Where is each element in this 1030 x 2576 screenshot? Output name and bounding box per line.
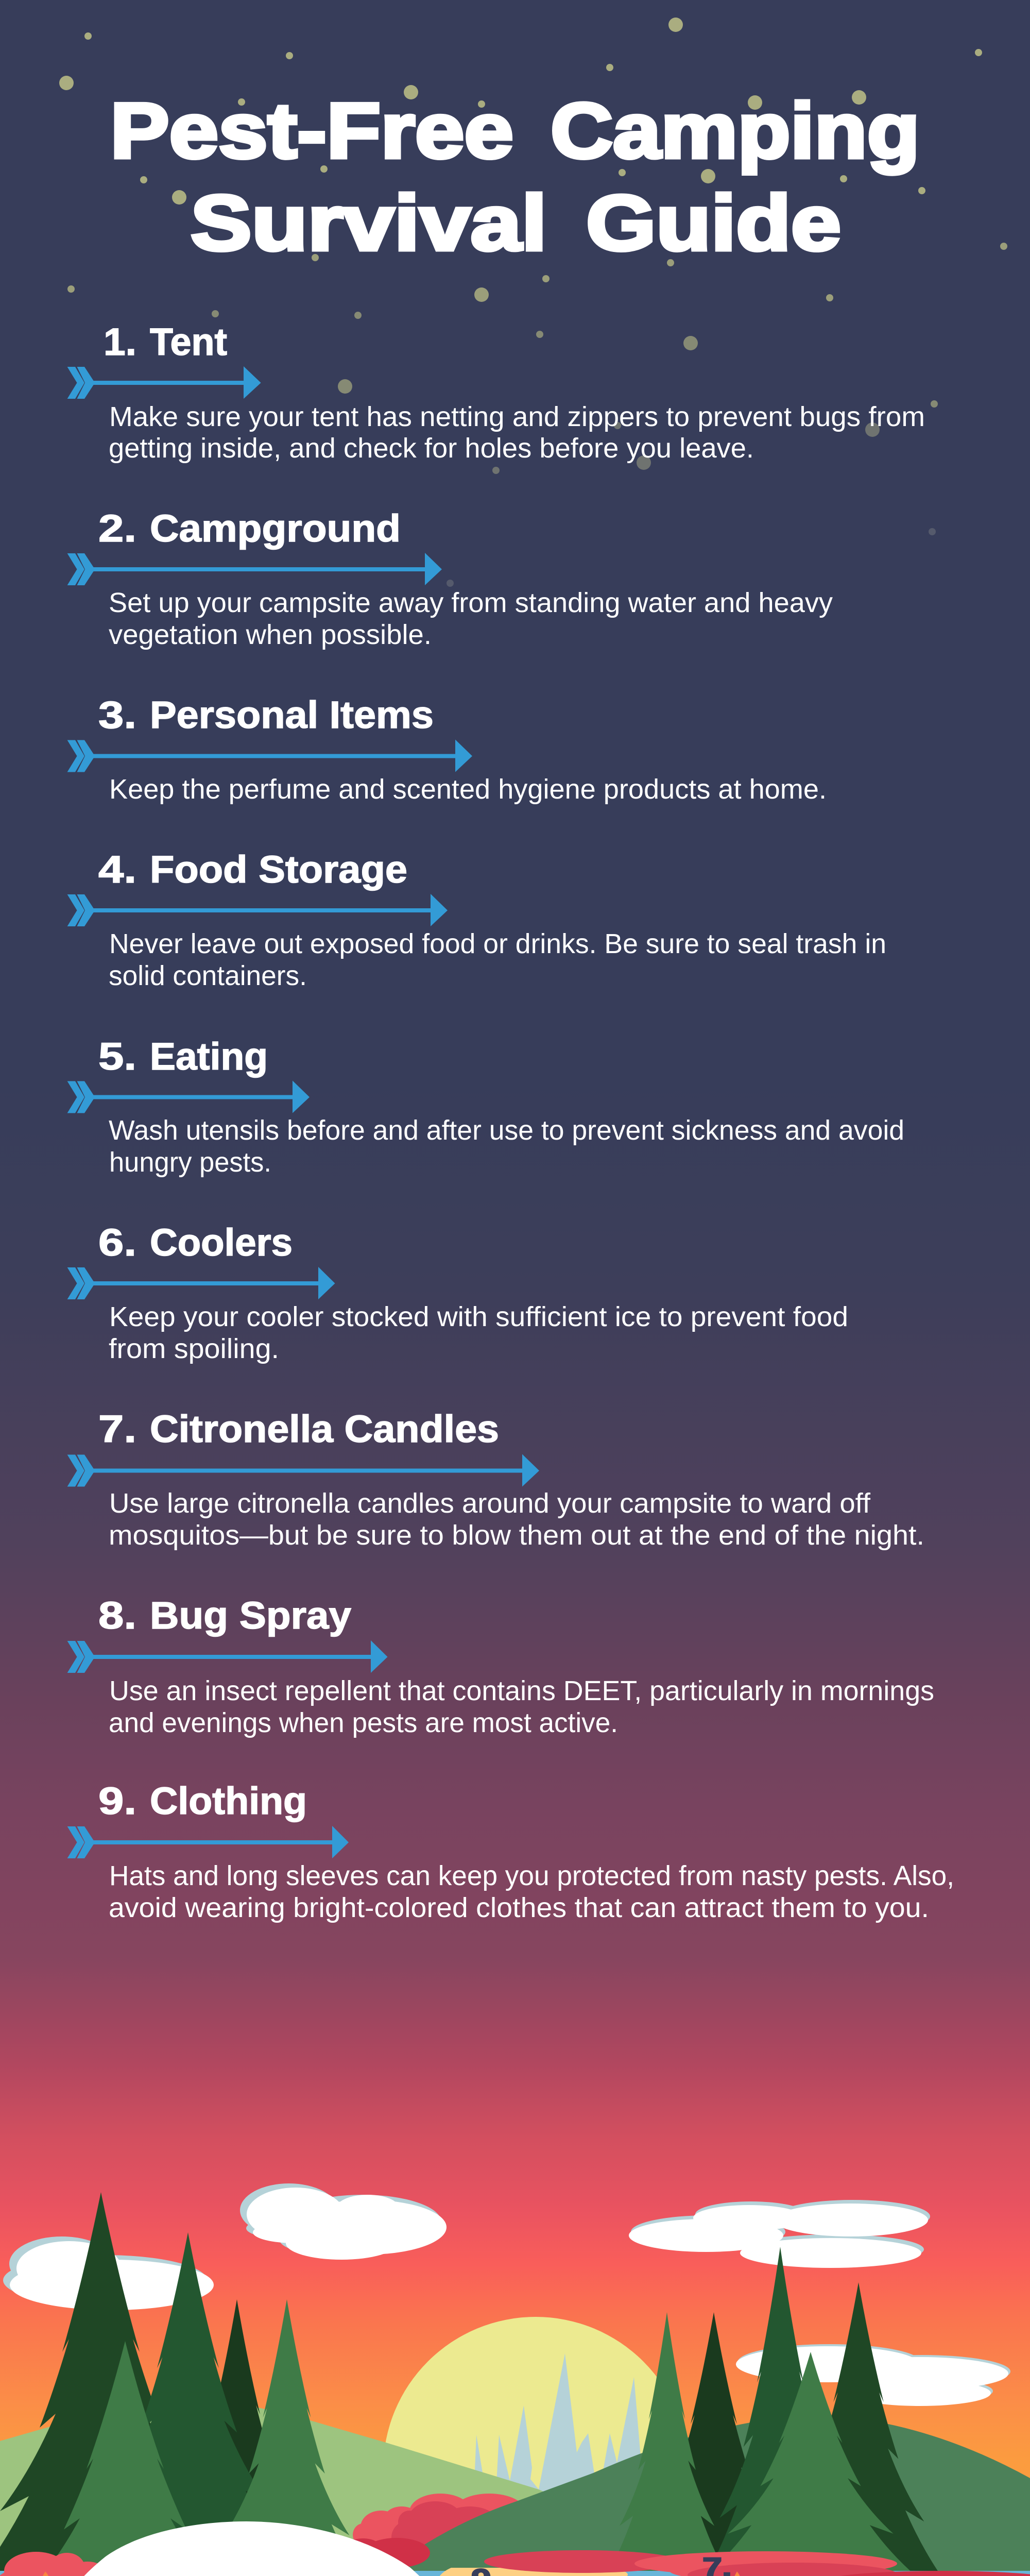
arrow bbox=[67, 553, 442, 585]
body text: Make sure your tent has netting and zippers to prevent bugs from bbox=[109, 401, 925, 432]
heading: 8. Bug Spray: 8. bbox=[98, 1594, 136, 1637]
title: Camping bbox=[551, 87, 920, 175]
lake bbox=[0, 2571, 1030, 2576]
body text: Use an insect repellent that contains DEET, particularly in mornings bbox=[109, 1675, 934, 1706]
body text bbox=[109, 1115, 904, 1178]
left bush by lake bbox=[0, 2552, 108, 2576]
heading: 4. Food Storage: Food Storage bbox=[150, 848, 407, 891]
body text: Wash utensils before and after use to prevent sickness and avoid bbox=[109, 1115, 904, 1146]
body text: Keep your cooler stocked with sufficient ice to prevent food bbox=[109, 1301, 848, 1332]
heading: 3. Personal Items: Personal Items bbox=[150, 693, 434, 736]
body text: avoid wearing bright-colored clothes that can attract them to you. bbox=[109, 1892, 929, 1923]
trailer body bbox=[59, 2521, 463, 2576]
heading: 2. Campground: Campground bbox=[150, 507, 401, 550]
heading: 6. Coolers: 6. bbox=[98, 1221, 136, 1264]
heading: 7. Citronella Candles: 7. bbox=[98, 1408, 136, 1450]
sun bbox=[383, 2317, 688, 2576]
title bbox=[110, 87, 920, 267]
body text bbox=[109, 1675, 934, 1738]
body text bbox=[109, 1301, 848, 1364]
heading: 7. Citronella Candles: Citronella Candles bbox=[150, 1408, 499, 1450]
arrow bbox=[67, 1826, 349, 1858]
heading: 5. Eating: Eating bbox=[150, 1035, 268, 1078]
arrow bbox=[67, 366, 261, 399]
tip 8: bug spray bbox=[67, 1594, 934, 1738]
body text bbox=[109, 587, 833, 650]
body text bbox=[109, 1860, 954, 1923]
body text bbox=[109, 401, 925, 464]
body text bbox=[109, 1488, 924, 1551]
body text: Never leave out exposed food or drinks. Be sure to seal trash in bbox=[109, 928, 886, 959]
arrow bbox=[67, 740, 472, 772]
tiki torch left bbox=[38, 2571, 52, 2576]
heading: 1. Tent bbox=[104, 320, 227, 363]
pine trees bbox=[0, 2192, 944, 2576]
body text: Keep the perfume and scented hygiene products at home. bbox=[109, 774, 827, 805]
clouds bbox=[3, 2183, 1010, 2406]
title: Guide bbox=[586, 179, 841, 267]
heading: 9. Clothing: Clothing bbox=[150, 1780, 307, 1822]
heading: 5. Eating bbox=[98, 1035, 268, 1078]
tip 7: citronella candles bbox=[67, 1408, 924, 1551]
body text: vegetation when possible. bbox=[109, 619, 432, 650]
body text: getting inside, and check for holes before you leave. bbox=[109, 433, 754, 464]
tip 1: tent bbox=[67, 320, 925, 464]
heading: 5. Eating: 5. bbox=[98, 1035, 136, 1078]
light green hill bbox=[0, 2394, 618, 2576]
heading: 6. Coolers: Coolers bbox=[150, 1221, 293, 1264]
body text bbox=[109, 928, 886, 991]
arrow bbox=[67, 1640, 388, 1673]
arrow bbox=[67, 1454, 539, 1487]
heading: 2. Campground: 2. bbox=[98, 507, 136, 550]
body text: Set up your campsite away from standing water and heavy bbox=[109, 587, 833, 618]
sandy peninsula bbox=[412, 2568, 667, 2576]
arrow bbox=[67, 1081, 310, 1113]
body text: Use large citronella candles around your campsite to ward off bbox=[109, 1488, 871, 1519]
dark green hill bbox=[397, 2415, 1030, 2576]
body text: hungry pests. bbox=[109, 1147, 271, 1178]
red bushes behind hill bbox=[353, 2494, 525, 2571]
heading: 1. Tent: Tent bbox=[150, 320, 227, 363]
distant pale trees bbox=[474, 2353, 644, 2524]
tip 6: coolers bbox=[67, 1221, 848, 1364]
title: Survival bbox=[191, 179, 547, 267]
tip 9: clothing bbox=[67, 1780, 954, 1923]
tip 2: campground bbox=[67, 507, 833, 650]
title: Pest-Free bbox=[110, 87, 513, 175]
tip 4: food storage bbox=[67, 848, 886, 991]
body text: mosquitos—but be sure to blow them out at the end of the night. bbox=[109, 1520, 924, 1551]
tip 3: personal items bbox=[67, 693, 827, 805]
starry sky bbox=[59, 18, 1007, 587]
body text: and evenings when pests are most active. bbox=[109, 1707, 618, 1738]
red shoreline bushes bbox=[484, 2550, 1030, 2576]
heading: 3. Personal Items: 3. bbox=[98, 693, 136, 736]
tip 5: eating bbox=[67, 1035, 904, 1178]
far red bush bbox=[342, 2538, 430, 2568]
body text: from spoiling. bbox=[109, 1333, 279, 1364]
body text: Hats and long sleeves can keep you protected from nasty pests. Also, bbox=[109, 1860, 954, 1891]
body text: solid containers. bbox=[109, 960, 307, 991]
arrow bbox=[67, 894, 448, 926]
caravan trailer bbox=[84, 2521, 419, 2576]
tiki torch right bbox=[729, 2571, 743, 2576]
arrow bbox=[67, 1267, 335, 1299]
heading: 8. Bug Spray: Bug Spray bbox=[150, 1594, 351, 1637]
heading: 1. Tent: 1. bbox=[104, 320, 136, 363]
heading: 9. Clothing: 9. bbox=[98, 1780, 136, 1822]
heading: 4. Food Storage: 4. bbox=[98, 848, 136, 891]
